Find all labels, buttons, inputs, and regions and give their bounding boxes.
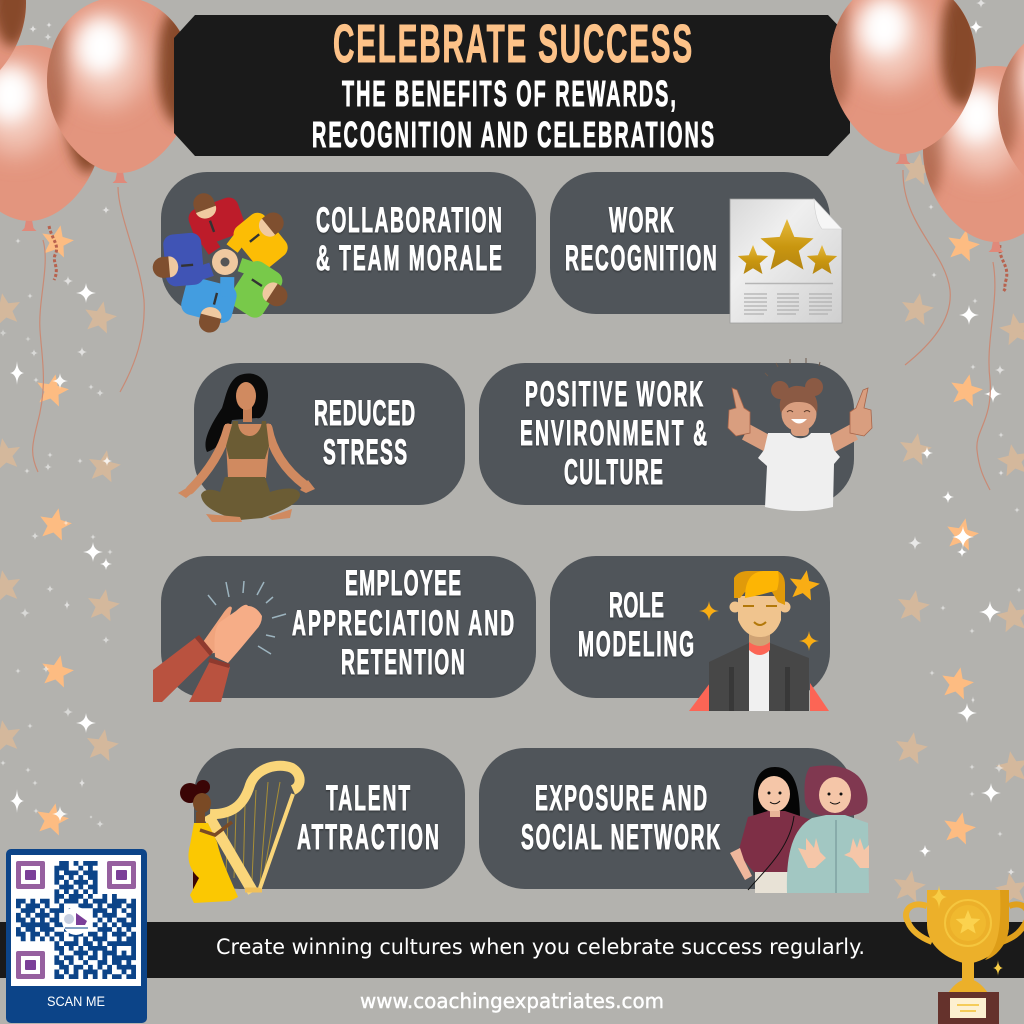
panel: role modeling <box>550 556 830 698</box>
icon: two friends waving <box>730 765 869 893</box>
header banner <box>174 15 850 156</box>
panel: work recognition: WORK <box>609 200 674 239</box>
panel: talent attraction <box>194 748 465 889</box>
decorative orange stars <box>33 222 985 846</box>
icon: woman playing harp <box>180 766 300 903</box>
panel: collaboration and team morale: & TEAM MORALE <box>316 238 502 277</box>
icon: gold trophy <box>906 885 1024 1024</box>
panel: exposure and social network: EXPOSURE AND <box>535 778 707 817</box>
panel: collaboration and team morale <box>161 172 536 314</box>
QR centre logo <box>62 907 90 935</box>
panel: positive work environment and culture: ENVIRONMENT & <box>520 413 707 452</box>
icon: meditating woman <box>178 374 315 522</box>
right balloons <box>821 0 1024 252</box>
left balloons <box>0 0 201 231</box>
panel: positive work environment and culture: CULTURE <box>564 452 663 491</box>
tagline: Create winning cultures when you celebrate success regularly. <box>216 935 865 959</box>
panel: work recognition: RECOGNITION <box>565 238 717 277</box>
QR modules <box>16 863 136 977</box>
QR code card <box>6 849 147 1023</box>
panel: employee appreciation and retention: EMPLOYEE <box>345 563 461 602</box>
icon: man with stars <box>689 568 829 711</box>
panel: employee appreciation and retention <box>161 556 536 698</box>
panel: employee appreciation and retention: APPRECIATION AND <box>292 603 514 642</box>
panel: reduced stress <box>194 363 465 505</box>
subtitle: RECOGNITION AND CELEBRATIONS <box>312 116 714 156</box>
title: CELEBRATE SUCCESS <box>333 15 692 74</box>
panel: exposure and social network: SOCIAL NETWORK <box>521 817 721 856</box>
QR finder squares <box>16 861 136 979</box>
panel: positive work environment and culture: POSITIVE WORK <box>525 374 704 413</box>
website url: www.coachingexpatriates.com <box>360 989 664 1013</box>
subtitle: THE BENEFITS OF REWARDS, <box>342 75 676 115</box>
panel: exposure and social network <box>479 748 854 889</box>
icon: team huddle <box>150 183 301 337</box>
icon: star document <box>730 199 842 323</box>
panel: work recognition <box>550 172 830 314</box>
panel: role modeling: ROLE <box>609 585 664 624</box>
icon: clapping hands <box>153 581 286 702</box>
panel: reduced stress: REDUCED <box>314 393 415 432</box>
icon: woman thumbs up <box>728 358 872 511</box>
scan me label: SCAN ME <box>47 994 105 1009</box>
bottom banner <box>0 922 1024 978</box>
panel: positive work environment and culture <box>479 363 854 505</box>
panel: talent attraction: ATTRACTION <box>297 817 439 856</box>
balloon strings and ribbons <box>33 170 1007 490</box>
subtitle <box>312 75 714 156</box>
panel: employee appreciation and retention: RETENTION <box>341 642 465 681</box>
decorative tan stars <box>0 150 1024 906</box>
panel: talent attraction: TALENT <box>326 778 410 817</box>
panel: role modeling: MODELING <box>578 624 694 663</box>
panel: reduced stress: STRESS <box>323 432 407 471</box>
panel: collaboration and team morale: COLLABORATION <box>316 200 502 239</box>
